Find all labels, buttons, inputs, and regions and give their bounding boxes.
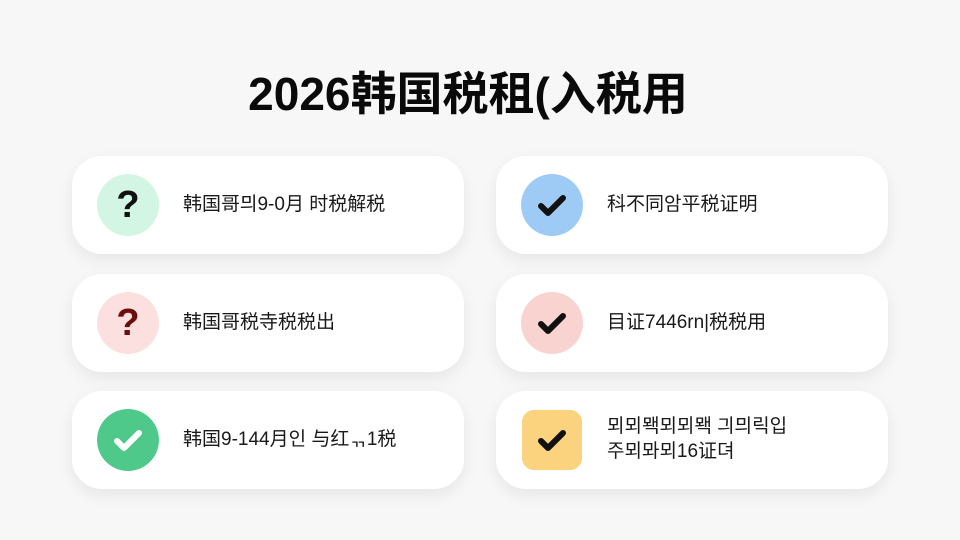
icon: question red: ? [116, 302, 140, 344]
card: left 1 [72, 156, 464, 254]
icon: check blue [521, 174, 583, 236]
text: 韩国哥税寺税税出 [183, 312, 335, 333]
icon: check pink [521, 292, 583, 354]
card: left 2 [72, 274, 464, 372]
icon: check green [97, 409, 159, 471]
text: 目证7446rn|税税用 [607, 312, 766, 333]
card: left 3 [72, 391, 464, 489]
text [607, 416, 787, 462]
card: right 3 [496, 391, 888, 489]
card: right 2 [496, 274, 888, 372]
icon: question red [97, 292, 159, 354]
icon: question green [97, 174, 159, 236]
text: 뫼뫼뫡뫼뫼뫡 긔믜릭입 [607, 416, 787, 437]
icon: question green: ? [116, 184, 140, 226]
title: 2026韩国税租(入税用 [248, 68, 688, 120]
text: 韩国9-144月인 与红ᆩ1税 [183, 429, 396, 450]
card: right 1 [496, 156, 888, 254]
text: 韩国哥믜9-0月 时税解税 [183, 194, 385, 215]
text: 주뫼뫄뫼16证뎌 [607, 441, 735, 462]
icon: check yellow [522, 410, 582, 470]
text: 科不同암平税证明 [607, 194, 757, 215]
